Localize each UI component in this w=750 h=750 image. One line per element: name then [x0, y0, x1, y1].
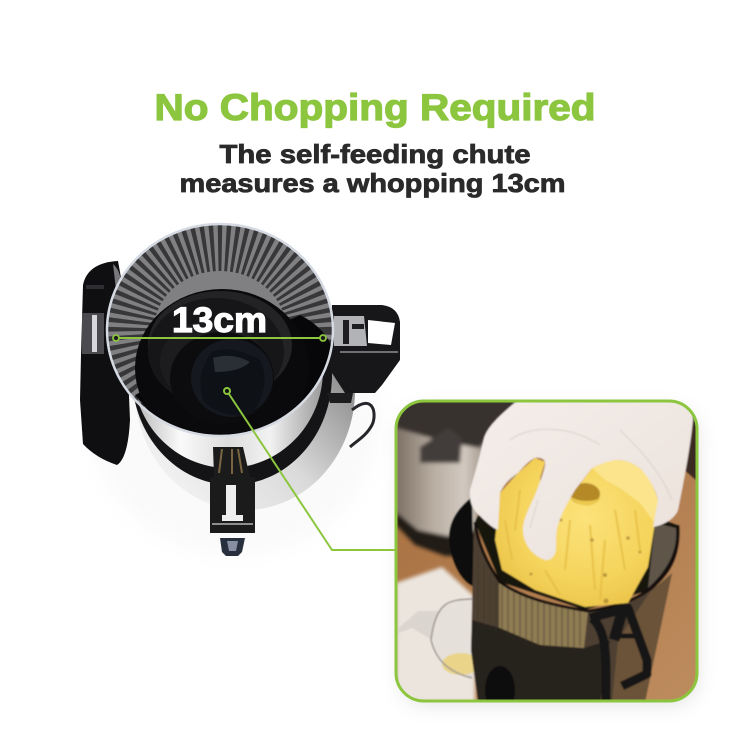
hinged lid — [80, 261, 130, 465]
right translucent side — [612, 573, 672, 702]
chute interior — [107, 224, 336, 450]
cylinder ribs — [498, 580, 581, 648]
gloved hand — [470, 400, 693, 560]
title: No Chopping Required — [154, 87, 596, 128]
13cm label: 13cm — [172, 301, 267, 340]
detail photo: pineapple in chute — [395, 400, 698, 714]
ribbed wall — [108, 225, 332, 410]
width dimension line — [113, 335, 326, 341]
open lid behind chute — [449, 497, 474, 587]
glass pitcher — [396, 597, 480, 678]
chute rim — [107, 224, 333, 436]
cylinder rim — [475, 522, 678, 611]
stainless chute wall — [133, 272, 323, 468]
photo green border — [396, 401, 697, 701]
dark background right — [685, 416, 696, 481]
lower black region — [135, 315, 331, 411]
chute interior behind pineapple — [474, 514, 678, 611]
photo shadow — [399, 408, 699, 706]
inner feed cone — [160, 320, 264, 404]
chute handle — [590, 608, 647, 702]
connector line to detail photo — [224, 388, 396, 550]
silver base — [135, 270, 355, 510]
wood table — [395, 400, 698, 702]
black collar — [132, 265, 332, 485]
pineapple fibres — [505, 490, 640, 600]
chute cylinder — [471, 522, 672, 702]
white towel — [396, 567, 475, 702]
spout — [210, 447, 255, 556]
subtitle — [180, 139, 566, 198]
dark inner well — [135, 289, 290, 393]
pineapple — [495, 458, 658, 607]
soft shadow under juicer — [90, 285, 380, 555]
subtitle: The self-feeding chute — [220, 139, 530, 169]
background juicer — [396, 400, 520, 556]
inner ring — [148, 291, 292, 380]
rear handle cord — [350, 403, 374, 447]
right handle — [327, 305, 400, 403]
dark lower chute — [471, 620, 610, 702]
glove creases — [510, 429, 672, 528]
pulp at bottom — [485, 666, 515, 700]
translucent amber window — [499, 583, 588, 650]
juicer top view photo — [80, 224, 400, 556]
subtitle: measures a whopping 13cm — [180, 168, 566, 198]
